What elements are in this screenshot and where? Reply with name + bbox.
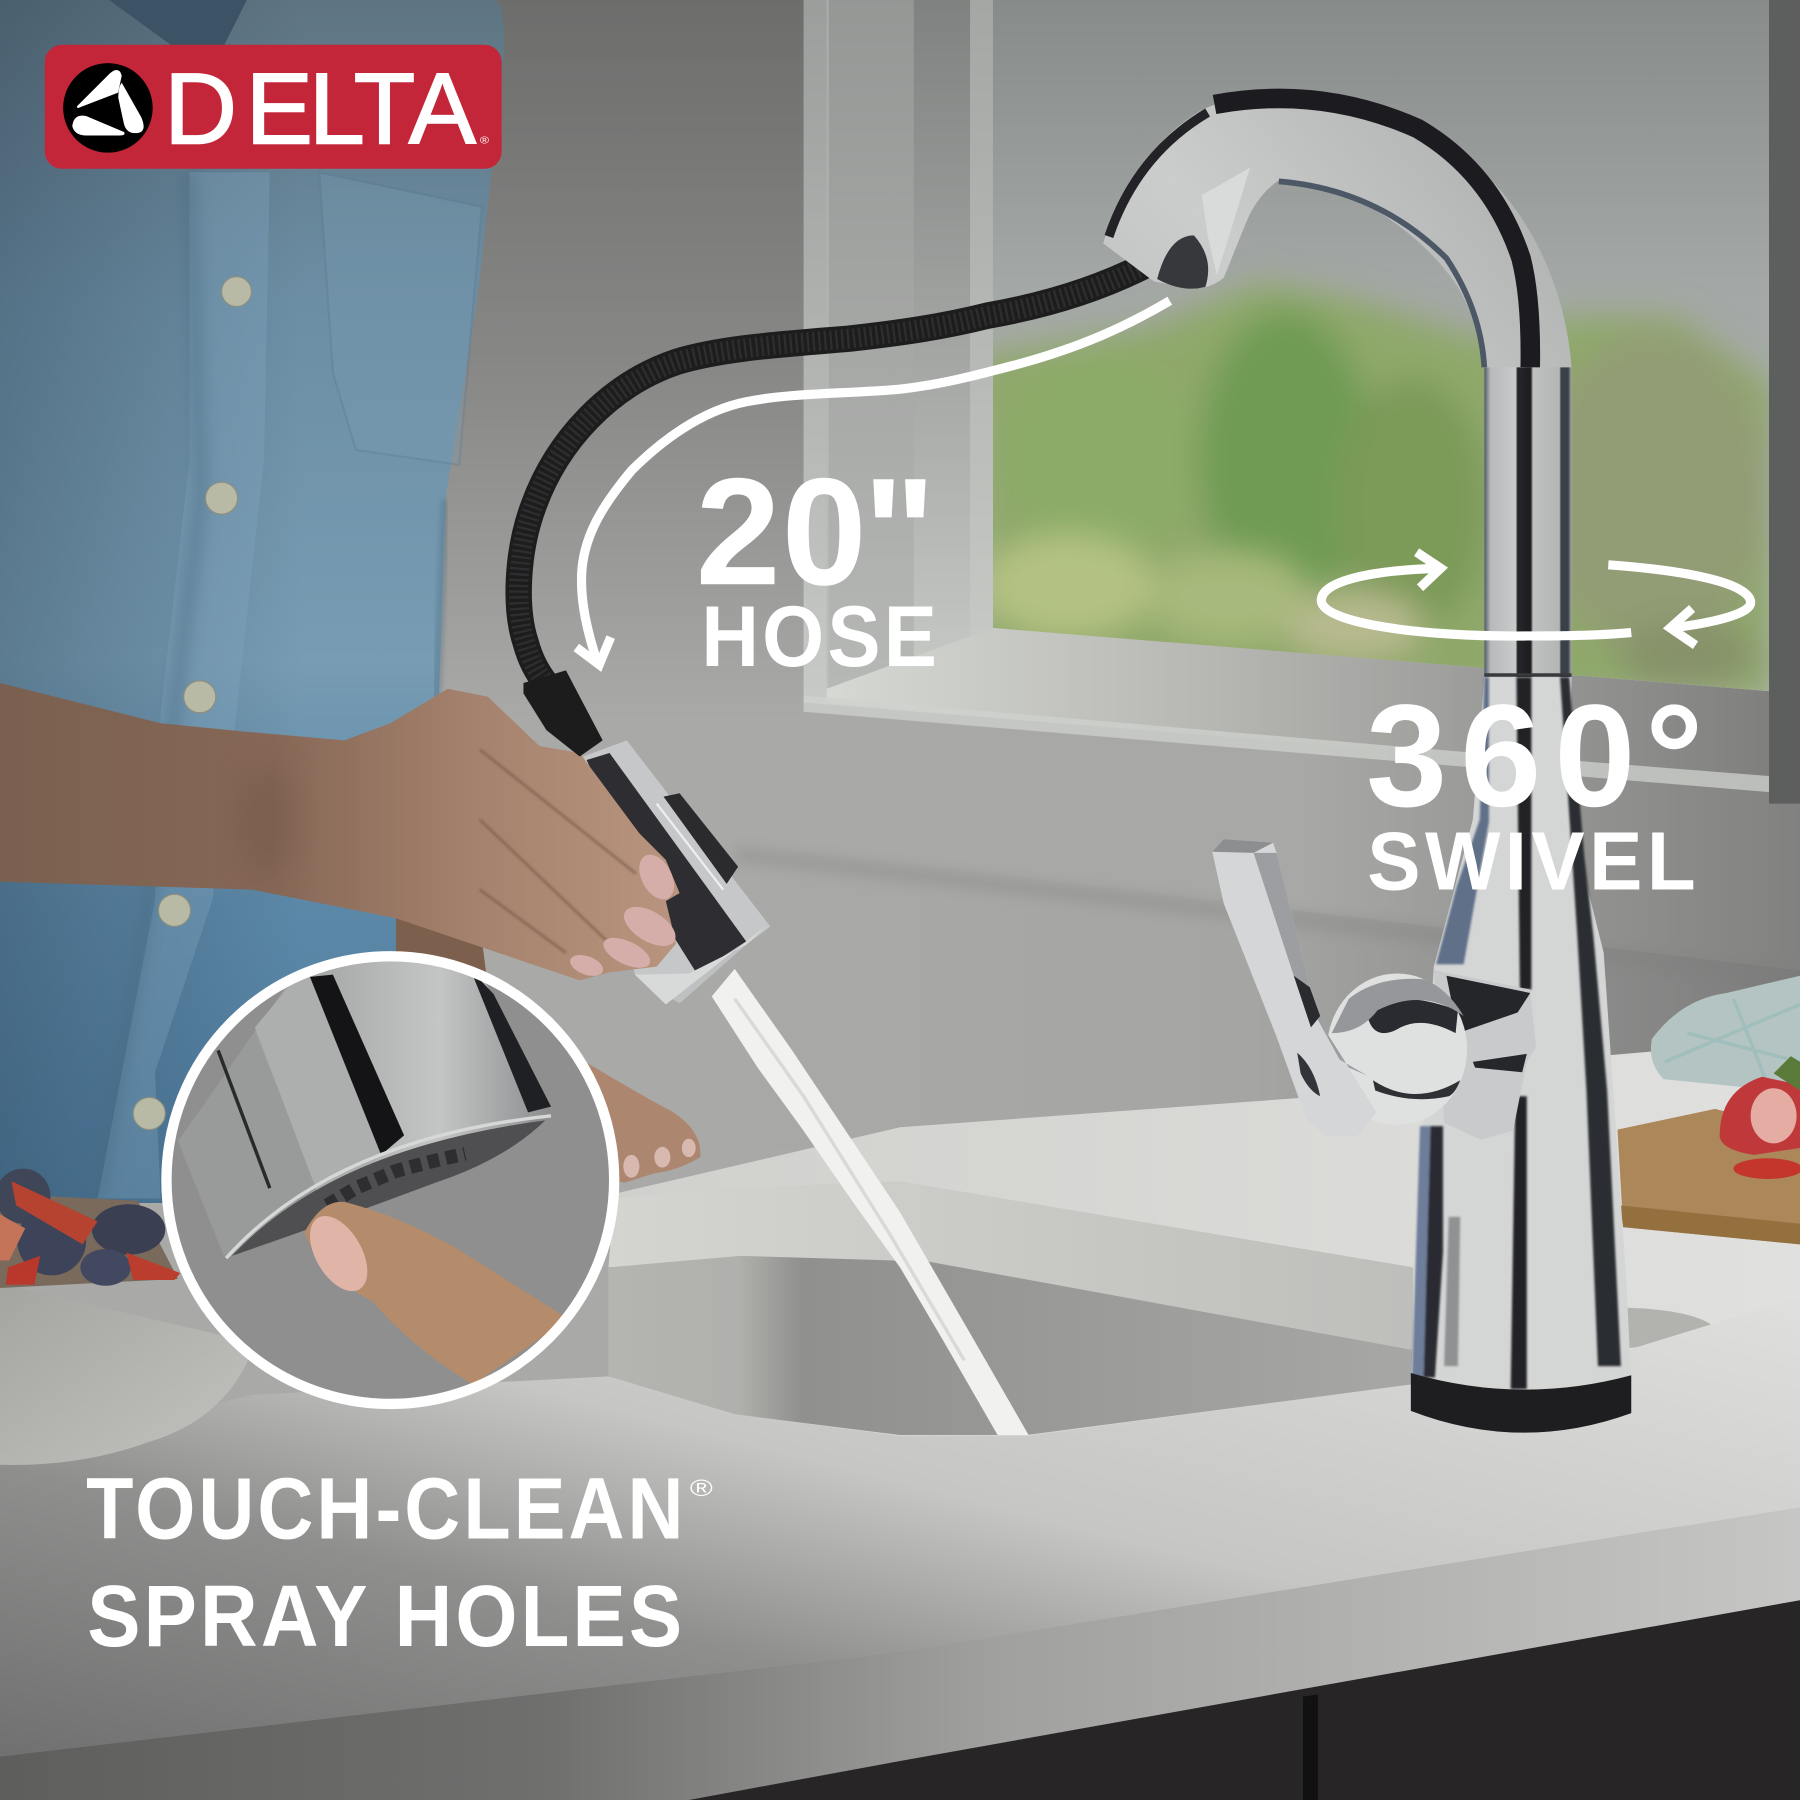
label: 360 degree swivel (1366, 674, 1703, 908)
water stream (712, 969, 1029, 1435)
countertop front edge (0, 1507, 1800, 1800)
shirt placket (98, 172, 270, 1198)
label: touch-clean spray holes: SPRAY HOLES (87, 1568, 685, 1665)
icon: strawberry (1720, 1056, 1800, 1179)
label: 20 inch hose: 20" (696, 447, 936, 617)
main hand holding wand (0, 683, 682, 980)
faucet spout (1103, 92, 1572, 689)
callout: spray head close-up (166, 953, 614, 1404)
logo: Delta: DELTA (164, 53, 477, 165)
faucet collar (1434, 970, 1536, 1140)
faucet handle (1212, 839, 1376, 1136)
label: 20 inch hose: HOSE (701, 589, 940, 685)
sink basin (608, 1256, 1413, 1435)
label: 360 degree swivel: 360° (1366, 674, 1703, 837)
faucet lower body (1411, 677, 1631, 1383)
logo: Delta: ® (480, 135, 489, 146)
sprayer close-up (222, 961, 534, 1250)
front countertop surface (0, 1297, 1800, 1756)
pull-down hose (519, 266, 1143, 684)
second hand resting on counter (585, 1062, 700, 1182)
denim shirt (0, 0, 504, 1203)
window frame and sill (712, 0, 1800, 1148)
faucet (1103, 92, 1631, 1433)
spray face (232, 1120, 545, 1256)
cabinet doors (689, 1600, 1800, 1800)
icon: Delta triangle mark (63, 63, 153, 153)
fingernails (567, 849, 682, 980)
finger pressing nozzle (304, 1202, 568, 1384)
sink basin right section (1619, 1308, 1712, 1349)
sleeve shadow (436, 499, 445, 712)
shirt collar (109, 0, 247, 46)
kitchen towel (1651, 976, 1800, 1093)
blurred trees (976, 281, 1774, 700)
label: touch-clean spray holes: ® (690, 1475, 713, 1501)
arrow: 360 degree swivel (1321, 552, 1751, 645)
label: touch-clean spray holes: TOUCH-CLEAN (86, 1460, 686, 1557)
label: 360 degree swivel: SWIVEL (1367, 815, 1700, 908)
nails (623, 1139, 696, 1178)
cutting board with strawberries (1617, 1056, 1800, 1244)
logo: Delta (45, 45, 502, 169)
window glass with trees (976, 0, 1774, 700)
hose connector (523, 670, 603, 757)
body stripes (1412, 677, 1621, 1389)
shirt pocket (319, 172, 482, 465)
wand button (664, 793, 738, 884)
shirt buttons (133, 277, 251, 1130)
bowl of fruit and cereal (0, 1169, 255, 1465)
forearm behind (396, 918, 488, 987)
faucet black base (1411, 1373, 1631, 1433)
label: touch-clean spray holes (86, 1460, 713, 1665)
faucet column (1484, 367, 1572, 677)
stone sink lip (608, 1181, 1413, 1350)
arrow: hose length (576, 301, 1170, 665)
countertop back section (614, 1039, 1800, 1527)
faucet hub (1327, 973, 1467, 1125)
spray wand (583, 740, 770, 1004)
